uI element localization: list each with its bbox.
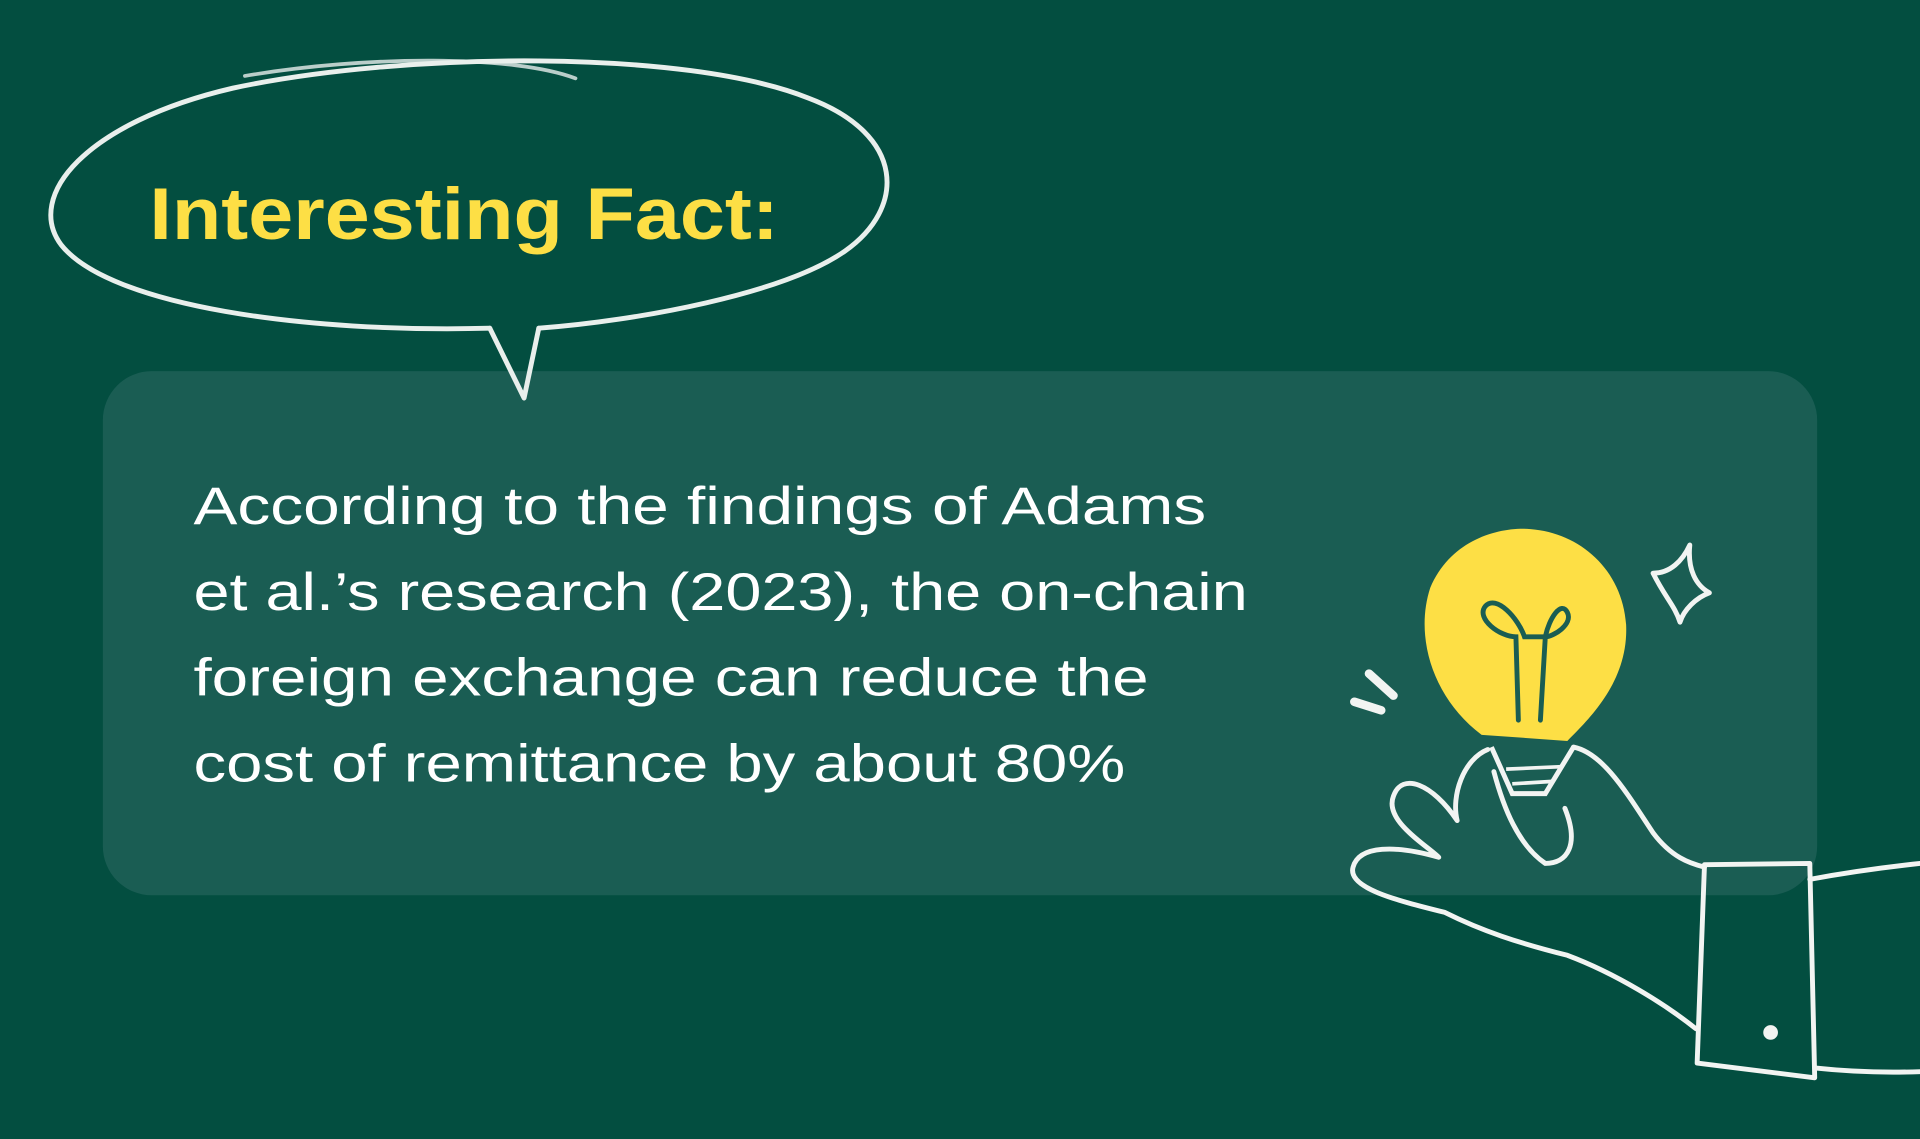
icon: hand holding lightbulb [1353, 529, 1920, 1078]
text block: fact body: According to the findings of Adams [193, 477, 1206, 536]
text block: fact body: et al.’s research (2023), the on-chain [193, 563, 1248, 622]
title: Interesting Fact: [149, 172, 779, 255]
icon: bulb [1425, 529, 1626, 794]
text block: fact body: foreign exchange can reduce the [193, 649, 1149, 708]
icon: hand [1353, 747, 1920, 1078]
text block: fact body: cost of remittance by about 80% [193, 734, 1125, 793]
icon: shine marks [1354, 674, 1393, 710]
text block: fact body [193, 477, 1248, 793]
icon: sparkle [1653, 545, 1709, 622]
speech bubble [51, 61, 887, 398]
panel: fact card [103, 371, 1817, 895]
